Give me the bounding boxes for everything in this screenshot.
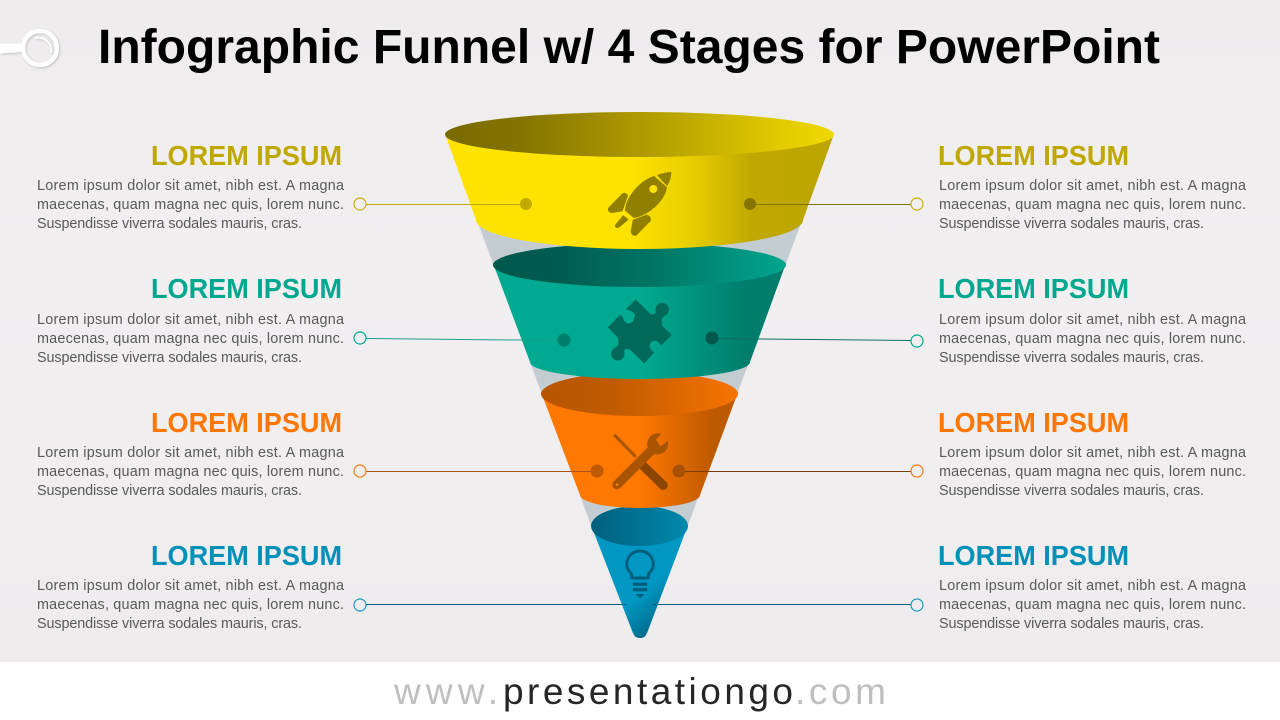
text block: stage 2 left: maecenas, quam magna nec quis, lorem nunc. bbox=[37, 331, 344, 347]
stage 1 yellow band bbox=[445, 112, 834, 249]
text block: stage 1 left: maecenas, quam magna nec quis, lorem nunc. bbox=[37, 197, 344, 213]
text block: stage 2 right bbox=[938, 273, 1246, 366]
connector: teal right bbox=[706, 332, 923, 347]
stage 2 teal band bbox=[493, 243, 786, 379]
text block: stage 1 right: maecenas, quam magna nec quis, lorem nunc. bbox=[939, 197, 1246, 213]
stage 3 orange band bbox=[541, 372, 738, 508]
title: Infographic Funnel w/ 4 Stages for PowerPoint bbox=[98, 21, 1160, 74]
footer url: presentationgo bbox=[503, 671, 793, 712]
text block: stage 1 left: Lorem ipsum dolor sit amet, nibh est. A magna bbox=[37, 178, 344, 194]
text block: stage 4 right: Lorem ipsum dolor sit amet, nibh est. A magna bbox=[939, 578, 1246, 594]
text block: stage 2 left: LOREM IPSUM bbox=[151, 273, 342, 304]
text block: stage 4 right: LOREM IPSUM bbox=[938, 540, 1129, 571]
text block: stage 1 right: LOREM IPSUM bbox=[938, 140, 1129, 171]
text block: stage 3 left: LOREM IPSUM bbox=[151, 407, 342, 438]
icon: puzzle piece bbox=[608, 299, 672, 363]
text block: stage 3 right bbox=[938, 407, 1246, 499]
connector: orange left bbox=[354, 464, 604, 478]
text block: stage 4 right bbox=[938, 540, 1246, 632]
text block: stage 1 left bbox=[37, 140, 344, 232]
connector: blue right bbox=[653, 599, 923, 611]
funnel grey core bbox=[476, 218, 803, 525]
text block: stage 1 right: Suspendisse viverra sodales mauris, cras. bbox=[939, 216, 1204, 232]
text block: stage 1 left: LOREM IPSUM bbox=[151, 140, 342, 171]
text block: stage 3 left: maecenas, quam magna nec quis, lorem nunc. bbox=[37, 464, 344, 480]
text block: stage 4 left bbox=[37, 540, 344, 632]
text block: stage 2 right: LOREM IPSUM bbox=[938, 273, 1129, 304]
text block: stage 1 right: Lorem ipsum dolor sit amet, nibh est. A magna bbox=[939, 178, 1246, 194]
connector: yellow left bbox=[354, 198, 532, 210]
text block: stage 4 left: Lorem ipsum dolor sit amet, nibh est. A magna bbox=[37, 578, 344, 594]
connector: yellow right bbox=[744, 198, 923, 210]
icon: light bulb bbox=[627, 551, 653, 598]
footer url: .com bbox=[795, 671, 886, 712]
text block: stage 2 right: Lorem ipsum dolor sit amet, nibh est. A magna bbox=[939, 312, 1246, 328]
text block: stage 4 left: Suspendisse viverra sodales mauris, cras. bbox=[37, 616, 302, 632]
text block: stage 2 right: maecenas, quam magna nec quis, lorem nunc. bbox=[939, 331, 1246, 347]
footer url bbox=[393, 671, 886, 712]
text block: stage 4 left: LOREM IPSUM bbox=[151, 540, 342, 571]
text block: stage 2 left bbox=[37, 273, 344, 366]
text block: stage 4 left: maecenas, quam magna nec quis, lorem nunc. bbox=[37, 597, 344, 613]
text block: stage 3 right: maecenas, quam magna nec quis, lorem nunc. bbox=[939, 464, 1246, 480]
icon: rocket bbox=[609, 173, 671, 235]
text block: stage 1 right bbox=[938, 140, 1246, 232]
stage 4 blue cone bbox=[591, 506, 688, 638]
funnel bbox=[37, 112, 1246, 712]
text block: stage 2 right: Suspendisse viverra sodales mauris, cras. bbox=[939, 350, 1204, 366]
text block: stage 1 left: Suspendisse viverra sodales mauris, cras. bbox=[37, 216, 302, 232]
text block: stage 2 left: Suspendisse viverra sodales mauris, cras. bbox=[37, 350, 302, 366]
icon: wrench and screwdriver bbox=[615, 433, 668, 486]
connector: orange right bbox=[672, 464, 923, 478]
text block: stage 4 right: maecenas, quam magna nec quis, lorem nunc. bbox=[939, 597, 1246, 613]
text block: stage 3 left: Lorem ipsum dolor sit amet, nibh est. A magna bbox=[37, 445, 344, 461]
text block: stage 4 right: Suspendisse viverra sodales mauris, cras. bbox=[939, 616, 1204, 632]
connector: blue left bbox=[354, 599, 627, 611]
text block: stage 3 right: Lorem ipsum dolor sit amet, nibh est. A magna bbox=[939, 445, 1246, 461]
footer url: www. bbox=[393, 671, 498, 712]
connector: teal left bbox=[354, 332, 570, 346]
text block: stage 3 left bbox=[37, 407, 344, 499]
text block: stage 3 left: Suspendisse viverra sodales mauris, cras. bbox=[37, 483, 302, 499]
text block: stage 3 right: Suspendisse viverra sodales mauris, cras. bbox=[939, 483, 1204, 499]
icon: logo ring with handle bbox=[0, 31, 57, 65]
text block: stage 3 right: LOREM IPSUM bbox=[938, 407, 1129, 438]
text block: stage 2 left: Lorem ipsum dolor sit amet, nibh est. A magna bbox=[37, 312, 344, 328]
